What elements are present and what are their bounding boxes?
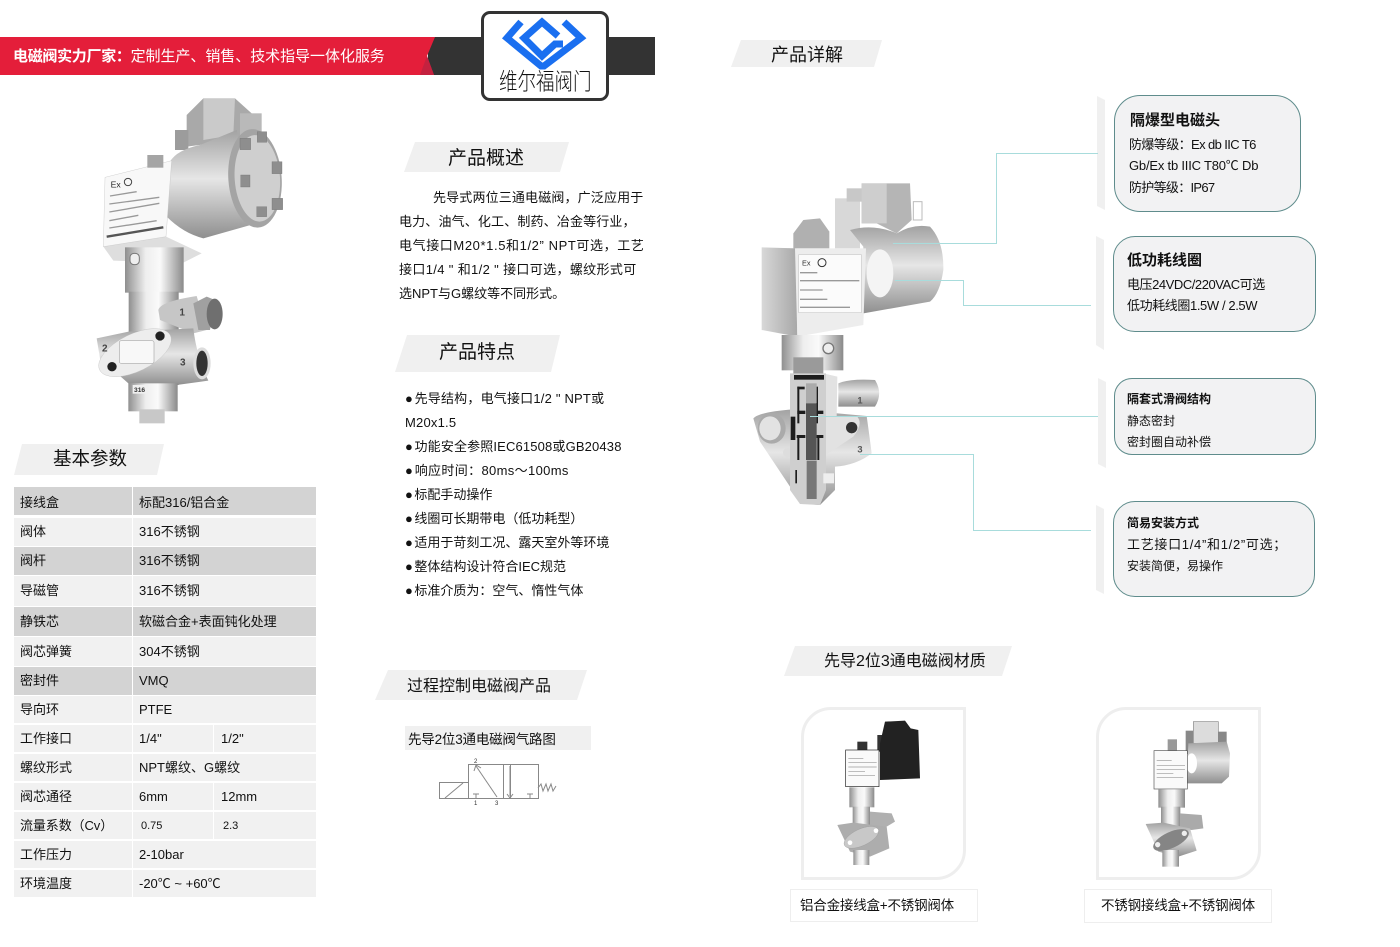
pneumatic circuit diagram: 1 <box>474 801 478 807</box>
parameter table: 阀杆 <box>20 553 46 568</box>
parameter table: 接线盒 <box>20 495 59 510</box>
logo badge: 维尔福阀门 <box>499 68 592 94</box>
feature list: ●线圈可长期带电（低功耗型） <box>405 511 583 526</box>
parameter table: VMQ <box>139 673 169 688</box>
heading: material options: 先导2位3通电磁阀材质 <box>824 653 986 670</box>
parameter table: 密封件 <box>20 673 59 688</box>
parameter table: 螺纹形式 <box>20 760 72 775</box>
callout: easy installation: 安装简便，易操作 <box>1127 559 1223 573</box>
callout: easy installation: 简易安装方式 <box>1127 516 1199 530</box>
feature list: ●标配手动操作 <box>405 487 492 502</box>
parameter table: 316不锈钢 <box>139 583 200 598</box>
parameter table: 1/4" <box>139 731 162 746</box>
parameter table: 12mm <box>221 789 257 804</box>
cutaway valve illustration: 1 <box>857 395 863 405</box>
feature list: M20x1.5 <box>405 415 456 430</box>
parameter table: 导向环 <box>20 702 59 717</box>
product photo: solenoid valve: 2 <box>102 343 108 354</box>
product photo: solenoid valve: 316 <box>134 387 145 394</box>
parameter table: NPT螺纹、G螺纹 <box>139 760 240 775</box>
callout: explosion-proof solenoid head: 防护等级：IP67 <box>1129 180 1214 195</box>
pneumatic circuit diagram: 3 <box>495 801 499 807</box>
parameter table: 316不锈钢 <box>139 553 200 568</box>
parameter table: 标配316/铝合金 <box>139 495 229 510</box>
parameter table: 1/2" <box>221 731 244 746</box>
overview text: 先导式两位三通电磁阀，广泛应用于 <box>433 190 643 205</box>
pneumatic circuit diagram <box>439 758 556 807</box>
feature list: ●响应时间：80ms～100ms <box>405 463 569 478</box>
callout: low-power coil <box>1113 236 1316 332</box>
callout: explosion-proof solenoid head: 防爆等级：Ex db IIC T6 <box>1129 137 1256 152</box>
caption: stainless box: 不锈钢接线盒+不锈钢阀体 <box>1101 898 1255 913</box>
valve photo: aluminium junction box <box>837 720 920 865</box>
parameter table: 工作压力 <box>20 847 72 862</box>
parameter table: 环境温度 <box>20 876 72 891</box>
parameter table: 2-10bar <box>139 847 184 862</box>
heading: product overview: 产品概述 <box>448 148 524 169</box>
callout: sleeve spool structure: 静态密封 <box>1127 414 1175 428</box>
product photo: solenoid valve: 3 <box>180 357 186 368</box>
heading: process control valves: 过程控制电磁阀产品 <box>407 678 551 695</box>
product photo: solenoid valve <box>96 98 283 424</box>
parameter table: -20℃ ~ +60℃ <box>139 876 221 891</box>
callout: sleeve spool structure: 密封圈自动补偿 <box>1127 435 1211 449</box>
callout: easy installation: 工艺接口1/4”和1/2”可选； <box>1127 537 1287 552</box>
cutaway valve illustration: Ex <box>802 258 811 267</box>
caption: aluminium box <box>790 889 978 922</box>
parameter table: 316不锈钢 <box>139 524 200 539</box>
feature list: ●适用于苛刻工况、露天室外等环境 <box>405 535 609 550</box>
parameter table: 导磁管 <box>20 583 59 598</box>
callout: sleeve spool structure <box>1114 378 1316 455</box>
pneumatic circuit diagram: 2 <box>474 759 478 765</box>
parameter table: 工作接口 <box>20 731 72 746</box>
callout: low-power coil: 电压24VDC/220VAC可选 <box>1127 277 1265 292</box>
callout: explosion-proof solenoid head <box>1114 95 1301 212</box>
callout: low-power coil: 低功耗线圈 <box>1127 252 1202 269</box>
parameter table: 2.3 <box>223 820 238 832</box>
cutaway valve illustration: 3 <box>857 445 863 455</box>
frame: stainless box valve <box>1096 707 1261 880</box>
overview text: 电气接口M20*1.5和1/2” NPT可选，工艺 <box>399 238 644 253</box>
feature list: ●标准介质为：空气、惰性气体 <box>405 583 583 598</box>
callout: low-power coil: 低功耗线圈1.5W / 2.5W <box>1127 298 1257 313</box>
logo badge <box>481 11 609 101</box>
parameter table: 304不锈钢 <box>139 644 200 659</box>
parameter table: 6mm <box>139 789 168 804</box>
caption: stainless box <box>1084 889 1272 923</box>
parameter table: 阀体 <box>20 524 46 539</box>
overview text <box>399 190 644 301</box>
feature list: ●整体结构设计符合IEC规范 <box>405 559 566 574</box>
caption: aluminium box: 铝合金接线盒+不锈钢阀体 <box>800 898 954 913</box>
section heading: basic parameters: 基本参数 <box>53 448 127 469</box>
callout: sleeve spool structure: 隔套式滑阀结构 <box>1127 392 1211 406</box>
heading: product details: 产品详解 <box>771 45 843 65</box>
overview text: 选NPT与G螺纹等不同形式。 <box>399 286 565 301</box>
frame: aluminium box valve <box>801 707 966 880</box>
valve photo: stainless junction box <box>1146 721 1230 867</box>
parameter table <box>14 487 316 897</box>
parameter table: 流量系数（Cv） <box>20 818 113 833</box>
heading: product features: 产品特点 <box>439 342 515 363</box>
diagram caption: 先导2位3通电磁阀气路图 <box>408 732 556 747</box>
parameter table: 阀芯通径 <box>20 789 72 804</box>
banner slogan: 电磁阀实力厂家：定制生产、销售、技术指导一体化服务 <box>13 48 385 65</box>
product photo: solenoid valve: 1 <box>179 307 185 318</box>
callout: explosion-proof solenoid head: Gb/Ex tb IIIC T80℃ Db <box>1129 158 1258 173</box>
parameter table: 软磁合金+表面钝化处理 <box>139 614 277 629</box>
callout: explosion-proof solenoid head: 隔爆型电磁头 <box>1130 112 1220 129</box>
feature list <box>405 391 622 598</box>
parameter table: 静铁芯 <box>20 614 59 629</box>
parameter table: 0.75 <box>141 820 162 832</box>
feature list: ●功能安全参照IEC61508或GB20438 <box>405 439 622 454</box>
overview text: 接口1/4 " 和1/2 " 接口可选，螺纹形式可 <box>399 262 637 277</box>
cutaway valve illustration <box>753 183 944 505</box>
parameter table: PTFE <box>139 702 172 717</box>
overview text: 电力、油气、化工、制药、冶金等行业， <box>399 214 636 229</box>
product photo: solenoid valve: Ex <box>111 179 121 189</box>
callout: easy installation <box>1113 501 1315 597</box>
parameter table: 阀芯弹簧 <box>20 644 72 659</box>
feature list: ●先导结构，电气接口1/2 " NPT或 <box>405 391 604 406</box>
